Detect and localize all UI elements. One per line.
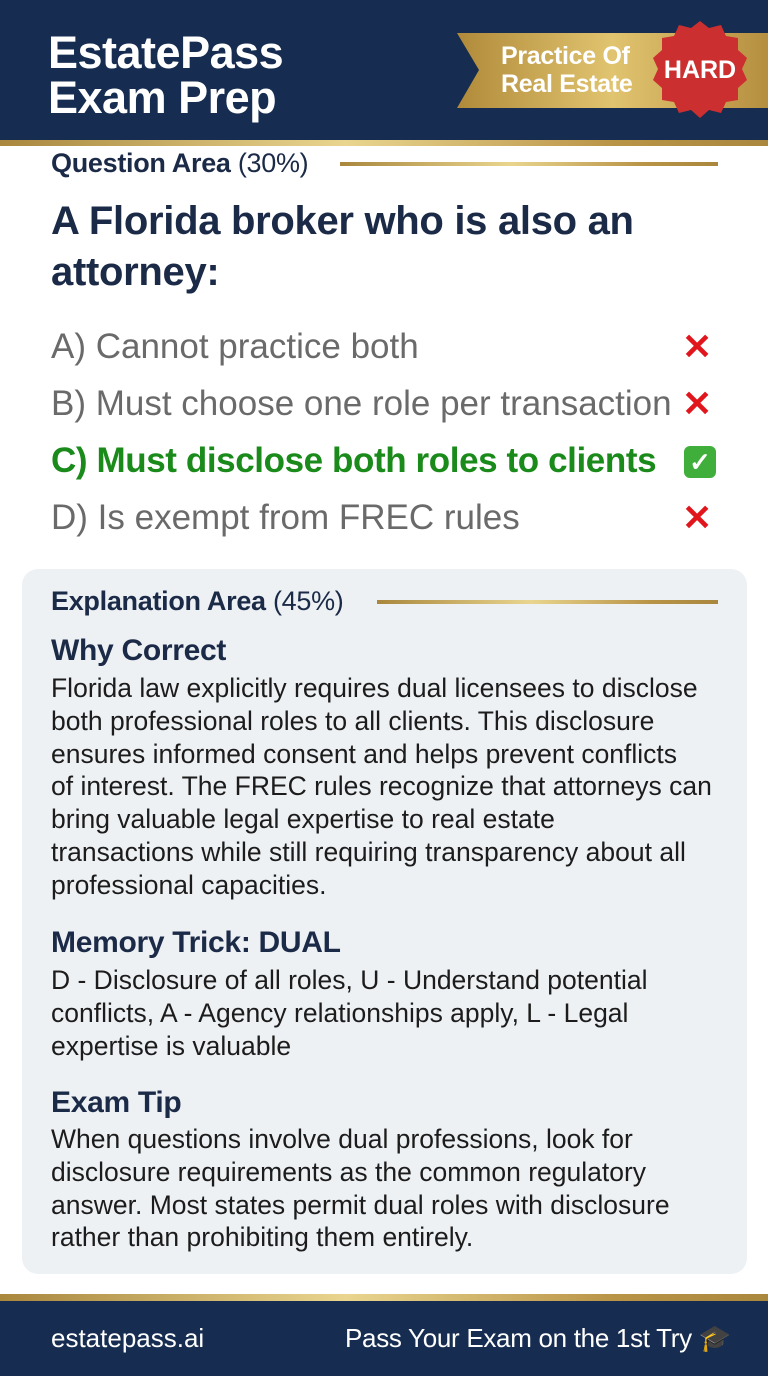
badge: HARD xyxy=(653,21,747,118)
text: why correct: ensures informed consent and helps prevent conflicts xyxy=(51,739,677,769)
text: exam tip: When questions involve dual professions, look for xyxy=(51,1124,633,1154)
heading: exam tip: Exam Tip xyxy=(51,1086,181,1119)
text: memory trick xyxy=(51,965,648,1061)
footer xyxy=(0,1301,768,1376)
text: exam tip: rather than prohibiting them entirely. xyxy=(51,1222,473,1252)
text: ✕ xyxy=(682,497,712,538)
option B: B) Must choose one role per transaction xyxy=(51,384,672,423)
text: ✕ xyxy=(682,326,712,367)
title: brand xyxy=(48,27,283,123)
text: exam tip: disclosure requirements as the common regulatory xyxy=(51,1157,646,1187)
title: brand: EstatePass xyxy=(48,27,283,78)
text: memory trick: expertise is valuable xyxy=(51,1031,291,1061)
text: memory trick: D - Disclosure of all roles, U - Understand potential xyxy=(51,965,648,995)
header xyxy=(0,0,768,140)
text: ✕ xyxy=(682,383,712,424)
title: brand: Exam Prep xyxy=(48,72,276,123)
text: why correct: bring valuable legal expertise to real estate xyxy=(51,804,555,834)
section heading: question area: Question Area (30%) xyxy=(51,148,308,178)
ribbon: category: Real Estate xyxy=(501,70,632,98)
text: why correct: professional capacities. xyxy=(51,870,326,900)
text: why correct: transactions while still requiring transparency about all xyxy=(51,837,686,867)
question text: attorney: xyxy=(51,250,219,294)
footer: url: estatepass.ai xyxy=(51,1323,204,1353)
text: why correct: both professional roles to all clients. This disclosure xyxy=(51,706,654,736)
icon: check xyxy=(684,446,716,478)
footer: tagline: Pass Your Exam on the 1st Try 🎓 xyxy=(345,1323,731,1353)
text: why correct: of interest. The FREC rules recognize that attorneys can xyxy=(51,771,712,801)
option A: A) Cannot practice both xyxy=(51,327,419,366)
panel: explanation xyxy=(22,569,747,1274)
text: why correct: Florida law explicitly requires dual licensees to disclose xyxy=(51,673,698,703)
option D: D) Is exempt from FREC rules xyxy=(51,498,520,537)
badge: HARD: HARD xyxy=(664,56,736,84)
ribbon: category xyxy=(457,33,768,108)
text: why correct xyxy=(51,673,712,900)
section heading: explanation: Explanation Area (45%) xyxy=(51,586,344,616)
ribbon: category: Practice Of xyxy=(501,42,630,70)
heading: memory trick: Memory Trick: DUAL xyxy=(51,926,341,959)
question text: A Florida broker who is also an xyxy=(51,199,634,243)
icon: check: ✓ xyxy=(689,447,711,477)
text: exam tip: answer. Most states permit dual roles with disclosure xyxy=(51,1190,670,1220)
text: exam tip xyxy=(51,1124,670,1252)
option C correct: C) Must disclose both roles to clients xyxy=(51,441,656,480)
heading: why correct: Why Correct xyxy=(51,634,226,667)
text: memory trick: conflicts, A - Agency relationships apply, L - Legal xyxy=(51,998,628,1028)
question text xyxy=(51,199,634,294)
